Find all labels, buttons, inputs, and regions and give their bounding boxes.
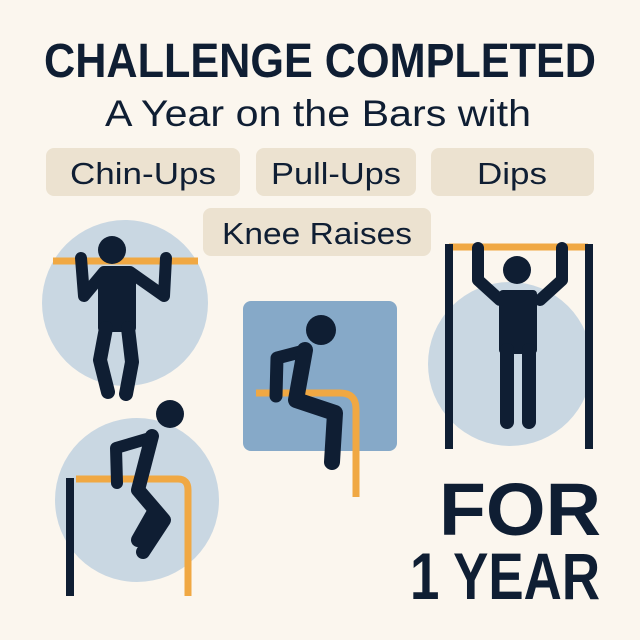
pill: Dips: Dips	[477, 156, 547, 191]
icon: pull-up figure	[428, 244, 592, 449]
pill: Dips	[431, 148, 594, 196]
icon: dip figure	[243, 301, 397, 497]
pill: Chin-Ups	[46, 148, 240, 196]
pill: Knee Raises	[203, 208, 431, 256]
pill: Pull-Ups	[256, 148, 416, 196]
subtitle: A Year on the Bars with	[105, 93, 531, 134]
icon: chin-up figure	[42, 220, 208, 394]
pill: Chin-Ups: Chin-Ups	[70, 156, 216, 191]
title: CHALLENGE COMPLETED	[44, 35, 596, 88]
text: FOR: FOR	[439, 468, 601, 551]
icon: knee raise figure	[55, 400, 219, 596]
pill: Pull-Ups: Pull-Ups	[271, 156, 401, 191]
pill: Knee Raises: Knee Raises	[222, 216, 412, 251]
